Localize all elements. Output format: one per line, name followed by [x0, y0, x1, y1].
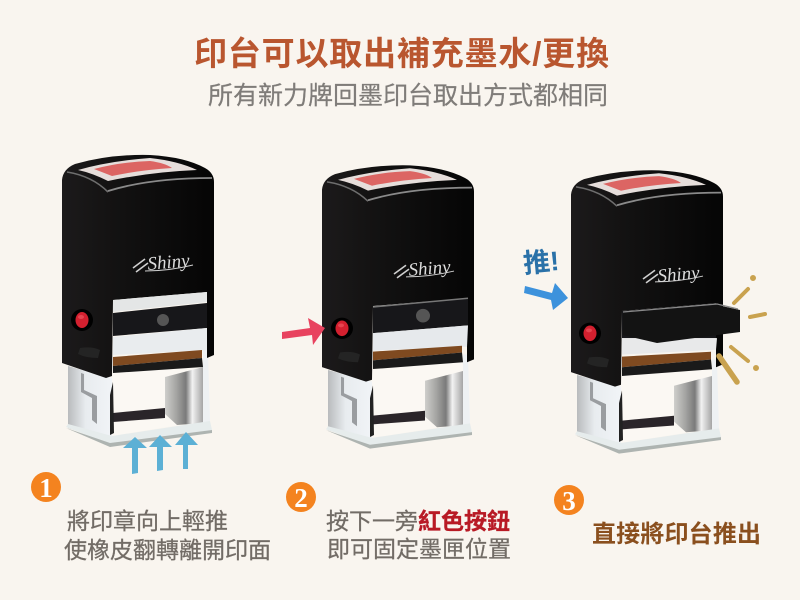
step 1 badge [31, 472, 61, 503]
step 2 text: 按下一旁紅色按鈕 [326, 508, 510, 534]
step 1 text: 使橡皮翻轉離開印面 [64, 537, 271, 563]
step 1 text [64, 508, 271, 563]
step 2 text: 即可固定墨匣位置 [327, 536, 511, 562]
arrow: blue push [524, 283, 568, 310]
red button [331, 318, 353, 339]
stamp 2: button pressed [322, 165, 474, 449]
title: 印台可以取出補充墨水/更換 [194, 35, 609, 72]
logo: Shiny: Shiny [147, 250, 191, 275]
step 1 text: 將印章向上輕推 [67, 508, 228, 534]
window strips [373, 298, 468, 369]
red button [579, 323, 601, 344]
arrow: red pointing to button [282, 318, 325, 345]
arrows: three blue up arrows [123, 432, 198, 474]
red button [71, 309, 93, 331]
ink tray [623, 304, 740, 343]
step 2 badge: 2 [294, 483, 308, 513]
step 3 text: 直接將印台推出 [592, 520, 761, 548]
step 3 badge [554, 485, 584, 516]
step 3 badge: 3 [562, 486, 576, 516]
window strips [113, 292, 207, 373]
icon: burst lines [719, 276, 765, 382]
stamp 1: pushed upward [62, 155, 214, 447]
stamp 3: ink tray pushed out [571, 170, 723, 454]
subtitle: 所有新力牌回墨印台取出方式都相同 [208, 82, 608, 110]
logo: Shiny: Shiny [408, 257, 452, 281]
step 2 badge [286, 482, 316, 513]
logo: Shiny: Shiny [657, 263, 701, 287]
label: push: 推! [522, 246, 560, 279]
step 2 text [326, 508, 511, 562]
window strips [622, 303, 717, 376]
step 1 badge: 1 [39, 473, 53, 503]
